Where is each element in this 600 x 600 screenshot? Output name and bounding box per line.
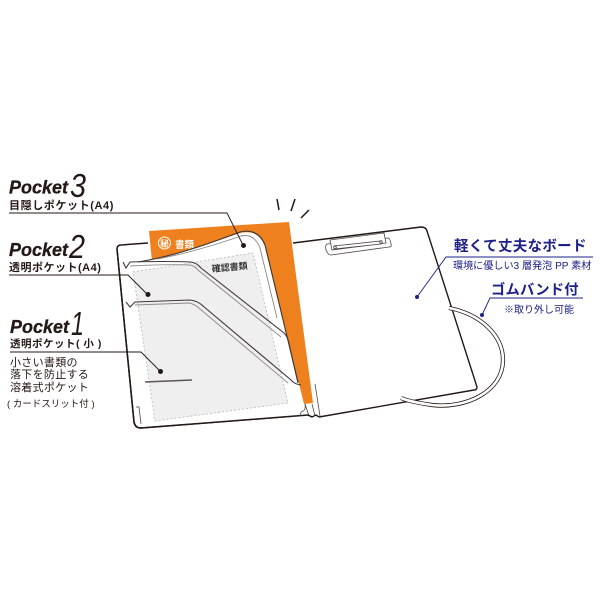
grey inner document [133,253,288,421]
pocket 1 description: 小さい書類の [10,355,78,369]
clip [326,233,391,255]
emphasis marks [277,199,309,218]
pocket 3 marker [241,243,246,248]
pocket 1 note: ( カードスリット付 ) [7,399,95,410]
board marker [415,295,419,299]
panel: open clipboard folder [117,222,503,428]
pocket 2 leader line [9,275,147,294]
pocket 2 marker [146,292,150,297]
pocket 1 heading: Pocket [10,317,70,337]
rubber band leader line [482,298,583,315]
pocket 1 description [10,355,89,394]
orange document sheet [149,222,313,404]
pocket 1 description: 溶着式ポケット [10,380,89,394]
pocket 2 subheading: 透明ポケット(A4) [9,260,101,274]
right board outline [293,227,477,417]
callout: pocket 3 [9,167,246,248]
pocket 3 leader line [9,213,243,245]
pocket 1 subheading: 透明ポケット( 小 ) [10,337,102,350]
pocket 1 leader line [10,352,160,371]
corner tabs [136,384,320,424]
pocket 1 diagonal edge [126,300,301,385]
pocket 2 diagonal edge [123,262,298,383]
document label: confidential documents: 書類 [175,239,195,251]
document label: confidential documents [158,237,195,251]
pocket 3 white cover [122,232,308,427]
rubber band marker [480,313,484,317]
board subheading: 環境に優しい3 層発泡 PP 素材 [453,259,591,272]
document label: confirmation documents: 確認書類 [211,260,248,274]
callout: rubber band [480,280,583,317]
pocket 2 heading: Pocket [9,240,69,260]
callout: light and sturdy board [415,237,593,299]
spine and hinge [308,415,319,417]
left board outline [117,243,312,428]
board leader line [417,257,593,297]
pocket 3 subheading: 目隠しポケット(A4) [9,199,114,212]
board heading: 軽くて丈夫なボード [454,237,587,255]
left board edge redraw [117,249,308,428]
pocket 1 marker [158,369,163,374]
rubber band note: ※取り外し可能 [504,303,574,316]
callout: pocket 1 [7,305,163,410]
pocket 3 edge [138,231,298,382]
pocket 3 heading: Pocket [9,178,69,198]
pocket 1 description: 落下を防止する [10,367,89,381]
pocket 1 number: 1 [71,305,84,342]
rubber band heading: ゴムバンド付 [491,280,579,298]
card slit [145,380,192,382]
pocket 3 number: 3 [70,167,87,204]
callout: pocket 2 [9,228,150,297]
pocket 2 number: 2 [68,228,85,265]
rubber band [401,308,503,406]
document label: confidential documents: 秘 [160,238,169,248]
